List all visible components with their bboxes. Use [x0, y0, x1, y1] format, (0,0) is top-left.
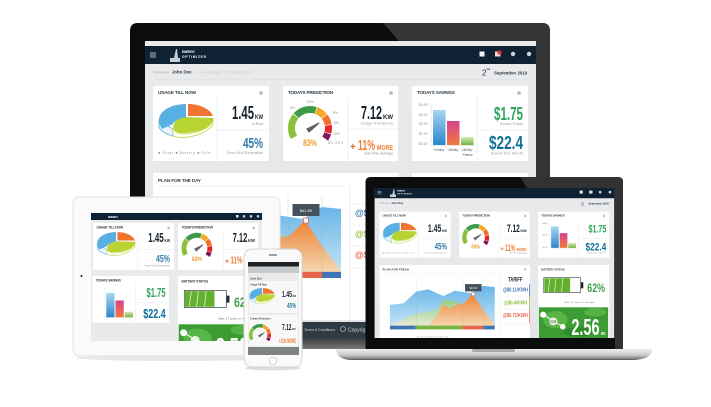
small panel: savings: $1.75 [589, 224, 606, 236]
tablet panel: prediction: TODAYS PREDICTION [181, 226, 214, 230]
panel: todays prediction: 7.12 [361, 103, 382, 123]
tariff rates: @$0.71/KWH [355, 250, 410, 260]
small bezel gloss [520, 177, 623, 349]
small panel: plan [379, 265, 530, 342]
tablet panel: battery: 2.56 [216, 334, 248, 362]
phone home button [269, 357, 277, 365]
tablet panel: prediction: 11% [230, 255, 243, 267]
panel: todays prediction: Usage Prediction [361, 122, 393, 126]
panel: todays prediction: 11% [358, 137, 375, 154]
small panel: prediction: 11% [505, 243, 516, 253]
panel: todays prediction: TODAYS PREDICTION [288, 90, 334, 95]
panel: todays savings: $0.00 [419, 142, 428, 146]
tablet header: ENERGY [108, 215, 118, 219]
panel: todays savings: Saved Today [500, 122, 523, 126]
panel: usage till now: USAGE TILL NOW [158, 90, 197, 95]
small panel: battery: BATTERY STATUS [541, 268, 565, 272]
panel: usage till now: 1.45 [232, 103, 254, 123]
small panel: battery: CO2 [551, 320, 557, 324]
small panel: savings: $22.4 [585, 241, 607, 253]
tablet panel: usage: USAGE TILL NOW [96, 226, 124, 230]
panel: todays prediction: 5% [334, 121, 339, 125]
phone panel: usage [249, 281, 298, 313]
small panel: savings: $4.00 [543, 223, 549, 225]
panel: plan for the day [153, 173, 398, 320]
small panel: prediction: TODAYS PREDICTION [462, 214, 490, 218]
tablet panel: prediction: + [225, 259, 229, 266]
tablet panel: usage: KW [164, 238, 170, 243]
small panel: usage: 1.45 [428, 223, 441, 235]
welcome row: John Doe [172, 70, 192, 74]
tablet header [91, 213, 262, 220]
welcome row: Welcome [153, 70, 170, 74]
phone panel: prediction [249, 315, 298, 346]
phone panel: usage: 1.45 [282, 290, 292, 299]
welcome row [153, 67, 528, 80]
laptop base [335, 349, 652, 360]
base notch [472, 349, 515, 352]
panel: todays savings: + Peakshave [462, 153, 473, 157]
small panel: savings [538, 212, 609, 258]
small welcome row: John Doe [391, 201, 404, 205]
phone app bar [248, 266, 299, 273]
phone body [244, 249, 302, 367]
phone status bar [248, 262, 299, 266]
small panel: battery: 00 [601, 331, 606, 336]
panel: usage till now: From Grid Generation [227, 151, 263, 155]
panel: todays savings: TODAYS SAVINGS [417, 90, 455, 95]
phone shadow [245, 366, 301, 370]
small header [375, 188, 614, 198]
phone panel: prediction: KW [292, 327, 296, 331]
small panel: battery [538, 265, 609, 344]
small welcome row: 2 [581, 201, 584, 207]
small panel: usage: USAGE TILL NOW [383, 214, 406, 218]
device: phone [244, 249, 302, 370]
panel: todays savings: $3.00 [419, 113, 428, 117]
small panel: plan: ■ Solar ■ Battery ■ Grid [417, 335, 449, 338]
small panel: prediction: 7.12 [507, 223, 520, 235]
welcome row: 2 [482, 68, 487, 78]
small panel: usage: 45% [435, 242, 447, 252]
small panel: prediction: + [500, 246, 504, 253]
panel: todays savings: $2.00 [419, 122, 428, 126]
tariff rates: @$0.11/KWH [355, 208, 410, 218]
small tariff: @$0.4/KWH [504, 300, 527, 306]
phone speaker [269, 254, 277, 256]
panel: todays savings [412, 86, 528, 161]
tablet panel: battery [178, 276, 244, 341]
panel: todays prediction: 10% [333, 132, 340, 136]
panel: plan for the day: $41.50 [300, 208, 313, 213]
small panel: usage [379, 212, 451, 258]
footer bar [302, 322, 366, 338]
small panel: plan: $41.50 [470, 287, 478, 290]
small panel: battery: 62% [587, 281, 605, 295]
panel: todays savings: With Battery [448, 148, 459, 152]
small panel: usage: ■ Solar ■ Battery ■ Grid [383, 251, 415, 254]
small panel: prediction: KW [520, 229, 527, 233]
device: small laptop [335, 177, 652, 366]
panel: todays savings: $4.00 [419, 103, 428, 107]
tablet panel: battery: BATTERY STATUS [181, 279, 209, 283]
lower bezel [130, 338, 550, 349]
small tariff: TARIFF [508, 277, 522, 284]
phone panel: prediction: +11% MORE [279, 339, 296, 345]
small panel: savings: Saved this Month [587, 252, 607, 255]
panel: todays savings: Saved this Month [491, 152, 523, 156]
footer bar: Copyright [348, 328, 370, 334]
small panel: battery: 2.56 [571, 314, 600, 340]
tablet panel: prediction: KW [248, 238, 255, 243]
panel: todays prediction: 83% [303, 138, 317, 148]
phone panel: usage: Usage Till Now [250, 284, 267, 286]
tablet panel: usage [93, 223, 174, 270]
tablet panel: prediction: MORE [244, 260, 256, 266]
panel: right lower [412, 173, 528, 177]
tablet panel: savings [92, 276, 169, 323]
panel: usage till now: ■ Solar ■ Battery ■ Grid [158, 151, 210, 155]
small panel: prediction [459, 212, 530, 258]
panel: todays prediction: MORE [377, 145, 393, 152]
tablet camera [80, 275, 82, 277]
panel: todays prediction: 80,000 [328, 141, 343, 145]
tablet panel: prediction: 83% [192, 256, 202, 263]
small panel: prediction: Over Prev. Average [509, 252, 527, 255]
bezel gloss [383, 23, 550, 177]
small panel: prediction: 83% [471, 244, 480, 250]
device: tablet [73, 197, 280, 366]
browser bar [145, 41, 536, 46]
small header: OPTIMIZER [397, 194, 413, 196]
tablet panel: usage: From Grid Generation [145, 264, 171, 267]
device: large laptop [130, 23, 550, 349]
panel: todays prediction: + [350, 142, 356, 153]
phone panel: usage: KW [292, 294, 296, 298]
small laptop screen [374, 188, 614, 338]
phone toolbar [248, 347, 299, 355]
tablet panel: savings: $22.4 [143, 307, 166, 321]
small tariff: @$0.11/KWH [503, 287, 528, 293]
tablet body [73, 197, 280, 356]
panel: plan for the day: PLAN FOR THE DAY [158, 178, 201, 183]
laptop bezel [130, 23, 550, 349]
tablet panel: prediction [178, 223, 258, 270]
welcome row: nd [486, 67, 490, 71]
small tariff [500, 273, 529, 342]
small panel: savings: TODAYS SAVINGS [541, 214, 565, 218]
panel: todays prediction: Over Prev. Average [364, 152, 393, 156]
welcome row: Your last login 2:56 9 Sept 2019 [198, 70, 252, 74]
header bar: OPTIMIZER [182, 55, 207, 59]
panel: todays savings: With Battery [462, 148, 473, 152]
panel: todays savings: $1.00 [419, 132, 428, 136]
panel: usage till now: KW [255, 115, 263, 121]
panel: todays prediction: KW [383, 115, 393, 121]
tablet shadow [76, 355, 276, 361]
header bar [145, 46, 536, 64]
tablet panel: battery: 62% [234, 294, 255, 310]
panel: usage till now [153, 86, 269, 161]
small panel: battery: Max 17 days of storage [565, 301, 595, 304]
phone panel: usage: 45% [287, 303, 296, 310]
phone name: John Doe [250, 276, 262, 280]
phone panel: prediction: 7.12 [282, 323, 292, 332]
phone panel: prediction: Todays Prediction [250, 318, 271, 320]
tablet panel: savings: $1.75 [147, 286, 166, 300]
small welcome row [380, 202, 609, 206]
panel: usage till now: 45% [243, 135, 263, 152]
small panel: savings: $0.00 [543, 247, 549, 249]
panel: todays prediction: 10% [307, 100, 313, 104]
tariff rates [350, 204, 366, 268]
small laptop bezel [366, 177, 623, 349]
header bar: ENERGY [182, 50, 196, 54]
panel: todays savings: $22.4 [489, 133, 523, 153]
tablet panel: battery: Max 17 days of storage [219, 316, 254, 320]
tablet panel: usage: 1.45 [148, 231, 164, 245]
small panel: usage: KW [442, 229, 447, 233]
footer bar: Terms & Conditions [304, 328, 335, 332]
panel: usage till now: of Roof [252, 122, 263, 126]
phone screen [248, 262, 299, 355]
panel: todays prediction: 5% [290, 106, 295, 110]
tablet panel: prediction: 7.12 [233, 231, 247, 245]
small welcome row: Welcome [379, 202, 390, 205]
panel: todays savings: No Battery [434, 148, 445, 152]
panel: todays prediction: 5% [333, 111, 338, 115]
small tariff: @$0.71/KWH [503, 313, 528, 319]
small panel: usage: From Grid Generation [425, 251, 448, 254]
small panel: savings: $2.00 [543, 235, 549, 237]
small panel: plan: PLAN FOR FRESH [383, 268, 409, 272]
tablet panel: usage: 45% [156, 253, 170, 265]
tablet panel: savings: TODAYS SAVINGS [96, 279, 121, 283]
panel: todays prediction [283, 86, 398, 161]
small panel: prediction: MORE [517, 247, 527, 252]
small welcome row: September 2019 [589, 202, 609, 206]
small header: ENERGY [397, 190, 406, 192]
welcome row: September 2019 [494, 70, 528, 76]
panel: todays savings: $1.75 [494, 104, 523, 124]
laptop screen [145, 41, 536, 338]
tablet screen [91, 213, 262, 341]
tariff rates: @$0.4/KWH [355, 229, 405, 239]
